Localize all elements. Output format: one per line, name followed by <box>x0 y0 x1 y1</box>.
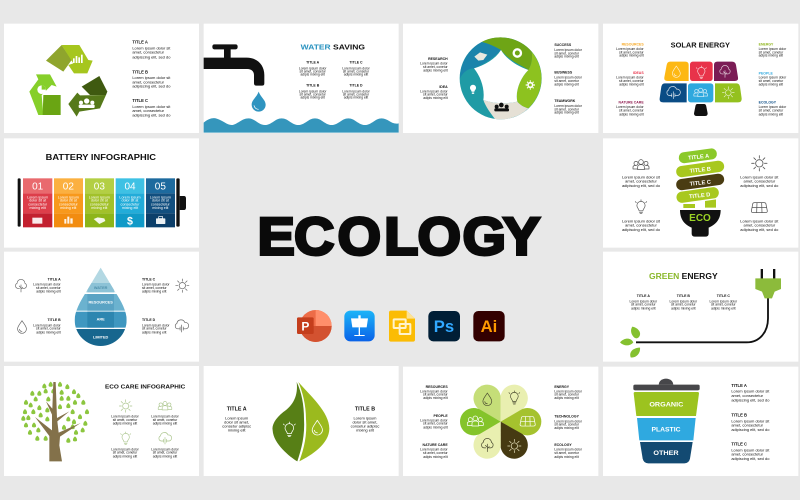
text: labels right: Lorem ipsum dolor <box>759 105 787 109</box>
text: titles right: adipis mixing elit <box>142 290 166 294</box>
text: water saving columns: sit amet, consetur <box>343 92 370 96</box>
text: labels left: sit amet, conetur <box>423 93 449 97</box>
text: titles left: TITLE B <box>47 318 61 322</box>
battery cell 01: consectetur <box>28 202 48 206</box>
text: titles right: Lorem ipsum dolor <box>142 283 170 287</box>
battery cell 04: mixing elit <box>122 206 138 210</box>
panel stand <box>694 104 708 116</box>
heading: eco care infographic: ECO CARE INFOGRAPHIC <box>105 385 185 391</box>
text: labels left: adipis mixing elit <box>423 425 448 429</box>
text: titles A B C: TITLE C <box>731 441 747 446</box>
text: titles A B C: adipiscing elit, sed do <box>132 84 171 89</box>
text: titles A B C: Lorem ipsum dolor sit <box>132 46 171 51</box>
text: title A: Lorem ipsum <box>225 416 249 421</box>
text: labels left: NATURE CARE <box>423 443 448 447</box>
text: titles right: TITLE D <box>142 318 156 322</box>
text: labels right: sit amet, conetur <box>554 393 580 397</box>
text: labels left: adipis mixing elit <box>423 396 448 400</box>
text: labels right: TECHNOLOGY <box>554 414 580 418</box>
software icons row <box>297 310 505 342</box>
text: water saving columns: adipis mixing elit <box>344 72 368 76</box>
text: labels right: adipis mixing elit <box>554 426 579 430</box>
text: columns: TITLE A <box>637 294 650 298</box>
water waves <box>204 118 399 133</box>
battery cell 04: Lorem ipsum <box>119 195 141 199</box>
bin chart: OTHER <box>653 450 679 457</box>
text: titles left: adipis mixing elit <box>36 330 61 334</box>
bulb spiral stripes: TITLE B <box>689 167 711 175</box>
text: descriptions: sit amet, conetur <box>153 418 178 422</box>
text: columns: adipis mixing elit <box>671 306 696 310</box>
text: labels left: Lorem ipsum dolor <box>420 62 449 66</box>
text: columns <box>630 294 738 310</box>
battery cell 01 <box>23 178 52 227</box>
text: labels right: adipis mixing elit <box>554 111 579 115</box>
drop chart: ARE <box>97 318 105 322</box>
text: columns: TITLE C <box>717 294 730 298</box>
text: labels left: sit amet, conetur <box>423 451 449 455</box>
text: labels left: Lorem ipsum dolor <box>420 389 449 393</box>
text: title B <box>351 406 379 432</box>
text: title A: consetur adipisc <box>222 423 251 428</box>
text: titles left: Lorem ipsum dolor <box>33 323 62 327</box>
text: labels right: adipis mixing elit <box>759 112 783 116</box>
battery terminals <box>18 178 186 227</box>
panel: water saving <box>204 24 399 133</box>
text: titles A B C: adipiscing elit, sed do <box>132 54 171 59</box>
text: titles A B C: amet, consectetur <box>132 108 165 113</box>
text: left descriptions <box>622 174 661 232</box>
bin chart: ORGANIC <box>649 402 684 409</box>
text: title B: Lorem ipsum <box>353 416 377 421</box>
text: water saving columns: sit amet, consetur <box>300 69 327 73</box>
heading: green energy: GREEN ENERGY <box>649 272 718 281</box>
text: left descriptions: amet, consectetur <box>625 223 658 228</box>
text: columns: adipis mixing elit <box>631 306 656 310</box>
bin chart <box>633 379 700 463</box>
panel: five-part circle <box>403 24 598 133</box>
text: columns: adipis mixing elit <box>711 306 736 310</box>
center title: ECOLOGY <box>258 208 540 266</box>
text: labels right: Lorem ipsum dolor <box>554 76 583 80</box>
text: labels left: adipis mixing elit <box>619 112 644 116</box>
icon: photoshop: Ps <box>434 317 454 336</box>
battery cell 04: 04 <box>124 182 136 193</box>
text: labels right: sit amet, conetur <box>759 79 784 83</box>
text: labels right: Lorem ipsum dolor <box>759 47 787 51</box>
text: descriptions: adipis mixing elit <box>113 454 137 458</box>
text: descriptions: sit amet, conetur <box>113 418 138 422</box>
text: water saving columns: Lorem ipsum dolor <box>299 89 327 93</box>
text: labels right: sit amet, conetur <box>554 79 580 83</box>
text: right descriptions: Lorem ipsum dolor sit <box>740 174 779 179</box>
battery cell 01: dolor sit at <box>29 199 46 203</box>
text: water saving columns: Lorem ipsum dolor <box>342 66 371 70</box>
text: labels right: sit amet, conetur <box>759 108 784 112</box>
text: descriptions: Lorem ipsum dolor <box>151 447 180 451</box>
bulb spiral stripes <box>675 148 725 208</box>
text: title A: dolor sit amet, <box>224 419 249 424</box>
battery cell 03: consectetur <box>90 202 110 206</box>
text: labels right: ENERGY <box>554 385 570 389</box>
text: titles A B C: amet, consectetur <box>731 393 764 398</box>
text: water saving columns: Lorem ipsum dolor <box>299 66 327 70</box>
text: labels left: Lorem ipsum dolor <box>616 76 645 80</box>
battery cell 04: $ <box>127 215 133 227</box>
panel: flower <box>403 367 598 476</box>
text: columns: Lorem ipsum dolor <box>670 299 698 303</box>
text: titles A B C: adipiscing elit, sed do <box>731 427 770 432</box>
bin chart: PLASTIC <box>651 427 681 434</box>
text: descriptions: Lorem ipsum dolor <box>111 447 140 451</box>
text: labels left: PEOPLE <box>434 414 448 418</box>
text: labels left: sit amet, conetur <box>423 65 449 69</box>
white star <box>474 50 528 103</box>
text: labels right: ECOLOGY <box>759 100 777 104</box>
panel: recycling bin <box>603 367 798 476</box>
text: titles A B C: TITLE C <box>132 98 148 103</box>
battery cell 02: dolor sit at <box>60 199 77 203</box>
text: descriptions: Lorem ipsum dolor <box>111 415 140 419</box>
text: titles left: sit amet, conetur <box>36 327 62 331</box>
text: labels left: sit amet, conetur <box>423 422 449 426</box>
text: left descriptions: adipiscing elit, sed do <box>622 227 661 232</box>
text: titles A B C: amet, consectetur <box>731 423 764 428</box>
text: descriptions: sit amet, conetur <box>153 451 178 455</box>
text: labels left: Lorem ipsum dolor <box>420 448 449 452</box>
text: water saving columns: TITLE D <box>349 84 363 88</box>
text: title A <box>222 406 251 432</box>
text: labels left: Lorem ipsum dolor <box>420 90 449 94</box>
text: water saving columns: Lorem ipsum dolor <box>342 89 371 93</box>
battery cell 05: dolor sit at <box>152 199 169 203</box>
battery cell 02: 02 <box>63 182 74 193</box>
text: columns: sit amet, conetur <box>671 303 697 307</box>
text: titles left: Lorem ipsum dolor <box>33 283 62 287</box>
text: labels right: sit amet, conetur <box>554 51 580 55</box>
text: titles A B C: TITLE A <box>731 383 747 388</box>
text: water saving columns: adipis mixing elit <box>344 95 368 99</box>
text: labels right: Lorem ipsum dolor <box>554 389 583 393</box>
text: labels left: adipis mixing elit <box>619 54 644 58</box>
battery cell 04: dolor sit at <box>122 199 138 203</box>
text: right descriptions: amet, consectetur <box>743 223 776 228</box>
text: right descriptions <box>740 174 779 232</box>
battery cell 04 <box>116 178 144 227</box>
battery cell 01: 01 <box>32 182 44 193</box>
text: titles A B C: adipiscing elit, sed do <box>731 456 770 461</box>
icon: photoshop <box>428 311 460 341</box>
text: labels right <box>759 42 787 116</box>
text: labels left: RESOURCES <box>426 385 448 389</box>
icon: google slides <box>389 311 415 342</box>
text: titles right: TITLE C <box>142 277 156 281</box>
text: titles A B C: TITLE A <box>132 39 148 44</box>
text: labels right: Lorem ipsum dolor <box>554 104 583 108</box>
text: water saving columns <box>299 61 371 99</box>
leaves <box>620 327 640 357</box>
heading: solar energy: SOLAR ENERGY <box>671 42 730 49</box>
text: labels right: BUSINESS <box>554 71 573 75</box>
recycle arrows <box>29 45 107 117</box>
text: labels right: sit amet, conetur <box>554 107 580 111</box>
battery cell 05: 05 <box>155 182 166 193</box>
text: title B: consetur adipisc <box>351 423 379 428</box>
text: labels left: sit amet, conetur <box>619 108 645 112</box>
battery cell 03: 03 <box>94 182 105 193</box>
text: titles left: TITLE A <box>48 277 61 281</box>
text: labels right <box>554 385 583 459</box>
text: water saving columns: sit amet, consetur <box>343 69 370 73</box>
text: titles A B C <box>731 383 770 461</box>
text: labels right: adipis mixing elit <box>554 396 579 400</box>
text: labels right: Lorem ipsum dolor <box>554 448 583 452</box>
battery cell 02: Lorem ipsum <box>58 195 79 199</box>
text: columns: sit amet, conetur <box>711 303 737 307</box>
leaf diagram <box>272 382 329 461</box>
text: titles A B C: Lorem ipsum dolor sit <box>731 389 770 394</box>
text: labels left <box>420 385 449 459</box>
text: titles A B C: Lorem ipsum dolor sit <box>132 75 171 80</box>
text: labels left: sit amet, conetur <box>423 393 449 397</box>
text: descriptions: sit amet, conetur <box>113 451 138 455</box>
text: columns: Lorem ipsum dolor <box>630 299 658 303</box>
text: labels right: sit amet, conetur <box>554 451 580 455</box>
battery cell 03 <box>85 178 114 227</box>
bulb spiral stripes: TITLE A <box>688 154 710 162</box>
text: labels right: ECOLOGY <box>554 443 572 447</box>
tree <box>21 382 89 461</box>
text: titles left: sit amet, conetur <box>36 286 62 290</box>
text: labels left: IDEA <box>439 85 448 89</box>
drop chart: WATER <box>94 286 108 290</box>
battery cell 03: dolor sit at <box>91 199 108 203</box>
text: labels right: Lorem ipsum dolor <box>554 48 583 52</box>
text: labels left: RESOURCES <box>622 42 644 46</box>
text: title B: TITLE B <box>355 406 375 412</box>
text: labels left: sit amet, conetur <box>619 50 645 54</box>
panel: water drop <box>4 252 199 362</box>
battery cell 03: mixing elit <box>91 206 107 210</box>
panel: eco care <box>4 366 199 476</box>
text: labels right: SUCCESS <box>554 43 572 47</box>
text: labels right: adipis mixing elit <box>759 83 783 87</box>
bulb spiral stripes: TITLE D <box>689 192 711 200</box>
text: titles right <box>142 277 170 334</box>
line icons <box>16 279 189 333</box>
solar panel tiles <box>660 62 742 102</box>
cable <box>636 297 768 342</box>
text: descriptions: adipis mixing elit <box>153 454 177 458</box>
battery cell 03: Lorem ipsum <box>89 195 110 199</box>
battery cell 02: mixing elit <box>60 206 76 210</box>
text: title B: mixing elit <box>356 427 375 432</box>
text: titles left: adipis mixing elit <box>36 290 61 294</box>
text: right descriptions: adipiscing elit, sed do <box>740 183 779 188</box>
battery cell 05: consectetur <box>151 202 171 206</box>
text: descriptions: adipis mixing elit <box>113 422 137 426</box>
text: labels left: NATURE CARE <box>619 101 644 105</box>
text: labels left: Lorem ipsum dolor <box>616 47 645 51</box>
text: titles A B C: amet, consectetur <box>731 451 764 456</box>
text: labels left: IDEAS <box>633 71 644 75</box>
battery cell 05: Lorem ipsum <box>150 195 171 199</box>
text: labels right <box>554 43 583 115</box>
text: titles A B C: Lorem ipsum dolor sit <box>731 418 770 423</box>
text: titles A B C: amet, consectetur <box>132 50 165 55</box>
drop chart: LIMITED <box>93 335 109 339</box>
text: labels left: Lorem ipsum dolor <box>420 418 449 422</box>
text: titles right: adipis mixing elit <box>142 330 166 334</box>
text: labels right: sit amet, conetur <box>759 50 784 54</box>
text: labels right: adipis mixing elit <box>554 55 579 59</box>
text: labels right: Lorem ipsum dolor <box>759 76 787 80</box>
text: left descriptions: Lorem ipsum dolor sit <box>622 218 661 223</box>
text: labels right: sit amet, conetur <box>554 423 580 427</box>
text: labels right: ENERGY <box>759 42 774 46</box>
text: left descriptions: Lorem ipsum dolor sit <box>622 174 661 179</box>
panel: leaf <box>204 366 399 476</box>
text: descriptions <box>111 415 180 458</box>
text: descriptions: adipis mixing elit <box>153 422 177 426</box>
battery cell 05: mixing elit <box>152 206 168 210</box>
text: labels left: RESEARCH <box>428 57 448 61</box>
text: titles A B C: Lorem ipsum dolor sit <box>132 104 171 109</box>
text: water saving columns: adipis mixing elit <box>300 95 325 99</box>
line icons <box>119 400 172 444</box>
bulb spiral stripes: TITLE C <box>689 180 711 188</box>
text: title A: mixing elit <box>228 427 246 432</box>
text: labels left: sit amet, conetur <box>619 79 645 83</box>
text: titles A B C: adipiscing elit, sed do <box>132 113 171 118</box>
panel: battery <box>4 138 199 248</box>
text: labels right: PEOPLE <box>759 72 773 76</box>
circular diagram <box>460 37 542 119</box>
battery cell 02: consectetur <box>59 202 79 206</box>
bulb base <box>680 210 721 237</box>
text: labels left: adipis mixing elit <box>619 83 644 87</box>
text: titles right: sit amet, conetur <box>142 327 167 331</box>
text: water saving columns: adipis mixing elit <box>300 72 325 76</box>
text: columns: Lorem ipsum dolor <box>710 299 738 303</box>
text: labels left: adipis mixing elit <box>423 455 448 459</box>
text: right descriptions: adipiscing elit, sed do <box>740 227 779 232</box>
bulb base: ECO <box>689 213 711 224</box>
line icons <box>633 156 767 214</box>
text: title B: dolor sit amet, <box>352 419 378 424</box>
drop chart <box>74 268 127 346</box>
text: right descriptions: Lorem ipsum dolor sit <box>740 218 779 223</box>
text: left descriptions: adipiscing elit, sed do <box>622 183 661 188</box>
text: titles A B C: TITLE B <box>132 69 148 74</box>
icon: illustrator: Ai <box>481 317 497 336</box>
plug <box>755 269 781 298</box>
text: descriptions: Lorem ipsum dolor <box>151 415 180 419</box>
battery cell 01: Lorem ipsum <box>27 195 48 199</box>
text: labels right: Lorem ipsum dolor <box>554 419 583 423</box>
panel: solar energy <box>603 24 798 133</box>
icon: faucet <box>204 44 264 86</box>
icon: powerpoint: P <box>301 319 309 333</box>
text: labels left: Lorem ipsum dolor <box>616 105 645 109</box>
text: titles A B C: adipiscing elit, sed do <box>731 398 770 403</box>
text: titles right: sit amet, conetur <box>142 286 167 290</box>
text: labels left: adipis mixing elit <box>423 96 448 100</box>
heading: water saving: WATER SAVING <box>301 43 365 52</box>
six-petal diagram <box>460 380 541 464</box>
text: title A: TITLE A <box>227 406 247 412</box>
text: titles right: Lorem ipsum dolor <box>142 323 170 327</box>
text: water saving columns: TITLE C <box>349 61 363 65</box>
drop chart: RESOURCES <box>89 301 113 305</box>
text: right descriptions: amet, consectetur <box>743 179 776 184</box>
text: titles left <box>33 277 62 334</box>
text: labels right: adipis mixing elit <box>759 54 783 58</box>
panel: eco bulb <box>603 138 798 248</box>
text: water saving columns: TITLE A <box>306 61 320 65</box>
text: titles A B C <box>132 39 171 118</box>
text: water saving columns: TITLE B <box>306 84 320 88</box>
text: labels right: TEAMWORK <box>554 99 576 103</box>
text: columns: TITLE B <box>677 294 690 298</box>
text: labels left: adipis mixing elit <box>423 68 448 72</box>
text: titles A B C: Lorem ipsum dolor sit <box>731 447 770 452</box>
text: titles A B C: amet, consectetur <box>132 79 165 84</box>
battery cell 04: consectetur <box>121 202 140 206</box>
heading: battery infographic: BATTERY INFOGRAPHIC <box>46 153 156 162</box>
text: labels right: adipis mixing elit <box>554 455 579 459</box>
icon: keynote <box>344 311 375 341</box>
battery cell 05 <box>146 178 175 227</box>
text: labels left <box>616 42 645 116</box>
text: labels left <box>420 57 449 100</box>
text: labels right: adipis mixing elit <box>554 82 579 86</box>
icon: water drop <box>252 92 266 112</box>
text: water saving columns: sit amet, consetur <box>300 92 327 96</box>
battery cell 02 <box>54 178 83 227</box>
panel: recycle <box>4 24 199 133</box>
icon: illustrator <box>473 311 505 341</box>
panel: green energy <box>603 252 798 362</box>
battery cell 01: mixing elit <box>30 206 46 210</box>
text: left descriptions: amet, consectetur <box>625 179 658 184</box>
text: columns: sit amet, conetur <box>631 303 657 307</box>
text: titles A B C: TITLE B <box>731 412 747 417</box>
icon: powerpoint <box>297 310 332 342</box>
